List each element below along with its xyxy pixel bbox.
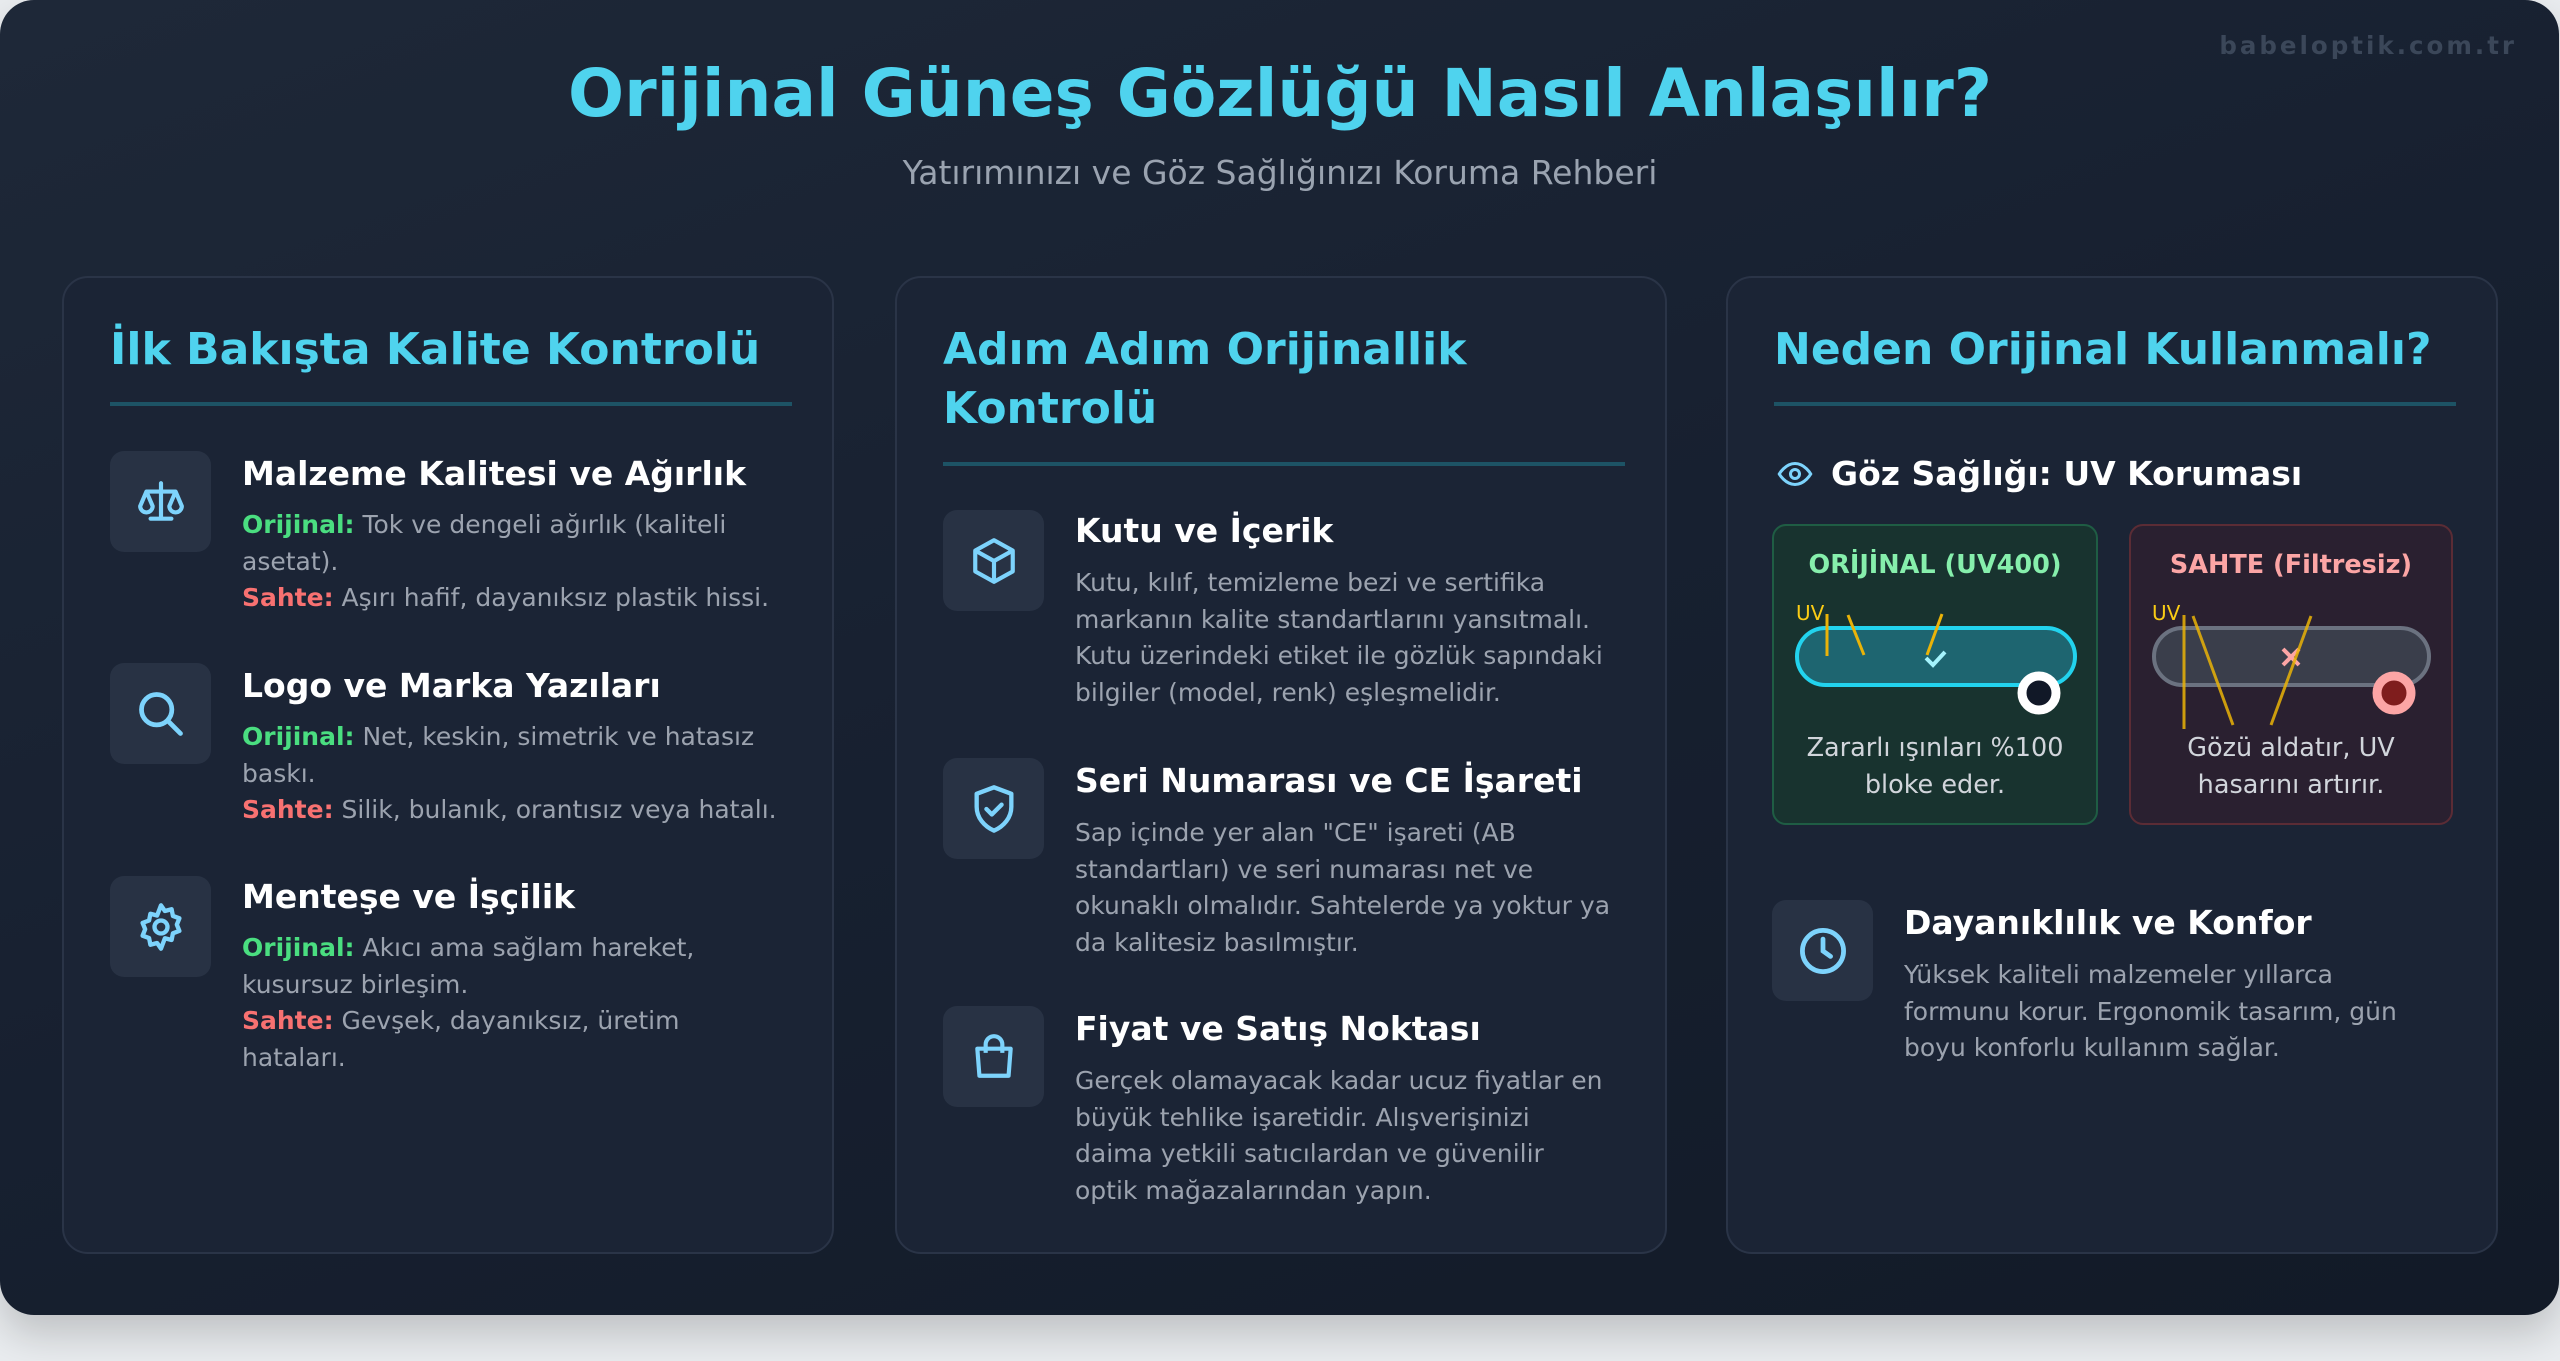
item body: kutu: Kutu, kılıf, temizleme bezi ve sertifika xyxy=(1075,568,1545,597)
heading middle xyxy=(943,324,1468,434)
item body 2: Sahte: Silik, bulanık, orantısız veya hatalı. xyxy=(242,795,777,824)
card: fake: hasarını artırır. xyxy=(2198,770,2384,800)
icon: search xyxy=(110,663,211,764)
item body: seri: da kalitesiz basılmıştır. xyxy=(1075,928,1359,957)
card: fake xyxy=(2129,524,2453,825)
item body 1: Orijinal: Tok ve dengeli ağırlık (kaliteli xyxy=(242,510,726,539)
item body: fiyat xyxy=(1075,1066,1603,1205)
card: original UV400: bloke eder. xyxy=(1865,770,2005,800)
item body 2: Orijinal: Net, keskin, simetrik ve hatasız xyxy=(242,722,754,751)
item body 3: kusursuz birleşim. xyxy=(242,970,468,999)
item title 2: Logo ve Marka Yazıları xyxy=(242,666,661,705)
item body 2: baskı. xyxy=(242,759,316,788)
item body: durability xyxy=(1904,960,2397,1062)
item title: seri: Seri Numarası ve CE İşareti xyxy=(1075,761,1583,800)
icon: clock xyxy=(1772,900,1873,1001)
card: original UV400: UV xyxy=(1796,601,1825,625)
item body 3: hataları. xyxy=(242,1043,346,1072)
item body: kutu: markanın kalite standartlarını yansıtmalı. xyxy=(1075,605,1590,634)
item body: seri xyxy=(1075,818,1610,957)
item body: seri: standartları) ve seri numarası net ve xyxy=(1075,855,1533,884)
heading middle: Kontrolü xyxy=(943,383,1157,434)
icon: gear xyxy=(110,876,211,977)
item body: kutu: bilgiler (model, renk) eşleşmelidir. xyxy=(1075,678,1501,707)
item body: fiyat: optik mağazalarından yapın. xyxy=(1075,1176,1432,1205)
icon: eye xyxy=(1778,462,1812,486)
watermark: babeloptik.com.tr xyxy=(2219,31,2517,60)
item body: seri: Sap içinde yer alan "CE" işareti (AB xyxy=(1075,818,1516,847)
heading left: İlk Bakışta Kalite Kontrolü xyxy=(110,324,760,375)
icon: scale xyxy=(110,451,211,552)
icon: shield xyxy=(943,758,1044,859)
item body: fiyat: büyük tehlike işaretidir. Alışverişinizi xyxy=(1075,1103,1530,1132)
item title 1: Malzeme Kalitesi ve Ağırlık xyxy=(242,454,746,493)
title: Orijinal Güneş Gözlüğü Nasıl Anlaşılır? xyxy=(568,55,1992,132)
item body 3 xyxy=(242,933,694,1072)
item body: durability: formunu korur. Ergonomik tasarım, gün xyxy=(1904,997,2397,1026)
heading right: Neden Orijinal Kullanmalı? xyxy=(1774,324,2431,375)
item body 1: Sahte: Aşırı hafif, dayanıksız plastik hissi. xyxy=(242,583,769,612)
item title: durability: Dayanıklılık ve Konfor xyxy=(1904,903,2312,942)
item body: durability: Yüksek kaliteli malzemeler yıllarca xyxy=(1904,960,2333,989)
card: original UV400: Zararlı ışınları %100 xyxy=(1807,733,2063,763)
item title: kutu: Kutu ve İçerik xyxy=(1075,511,1333,550)
card: fake: Gözü aldatır, UV xyxy=(2187,733,2395,763)
item body 1 xyxy=(242,510,769,612)
icon: box xyxy=(943,510,1044,611)
panel: right why original xyxy=(1726,276,2498,1254)
item body: durability: boyu konforlu kullanım sağlar. xyxy=(1904,1033,2280,1062)
item body 1: asetat). xyxy=(242,547,338,576)
card: original UV400 xyxy=(1772,524,2098,825)
card: fake: UV xyxy=(2152,601,2181,625)
subtitle: Yatırımınızı ve Göz Sağlığınızı Koruma Rehberi xyxy=(903,153,1657,192)
item body: kutu xyxy=(1075,568,1603,707)
item title: fiyat: Fiyat ve Satış Noktası xyxy=(1075,1009,1481,1048)
heading middle: Adım Adım Orijinallik xyxy=(943,324,1466,375)
item title 3: Menteşe ve İşçilik xyxy=(242,877,575,916)
item body: fiyat: daima yetkili satıcılardan ve güvenilir xyxy=(1075,1139,1544,1168)
item body 3: Orijinal: Akıcı ama sağlam hareket, xyxy=(242,933,694,962)
subheading UV: Göz Sağlığı: UV Koruması xyxy=(1831,454,2302,493)
panel: left quality check xyxy=(62,276,834,1254)
card: fake: SAHTE (Filtresiz) xyxy=(2170,550,2412,580)
item body 2 xyxy=(242,722,777,824)
item body: seri: okunaklı olmalıdır. Sahtelerde ya yoktur ya xyxy=(1075,891,1610,920)
card: original UV400: ORİJİNAL (UV400) xyxy=(1809,550,2061,580)
item body 3: Sahte: Gevşek, dayanıksız, üretim xyxy=(242,1006,679,1035)
item body: fiyat: Gerçek olamayacak kadar ucuz fiyatlar en xyxy=(1075,1066,1603,1095)
item body: kutu: Kutu üzerindeki etiket ile gözlük sapındaki xyxy=(1075,641,1603,670)
panel: middle step by step xyxy=(895,276,1667,1254)
icon: bag xyxy=(943,1006,1044,1107)
